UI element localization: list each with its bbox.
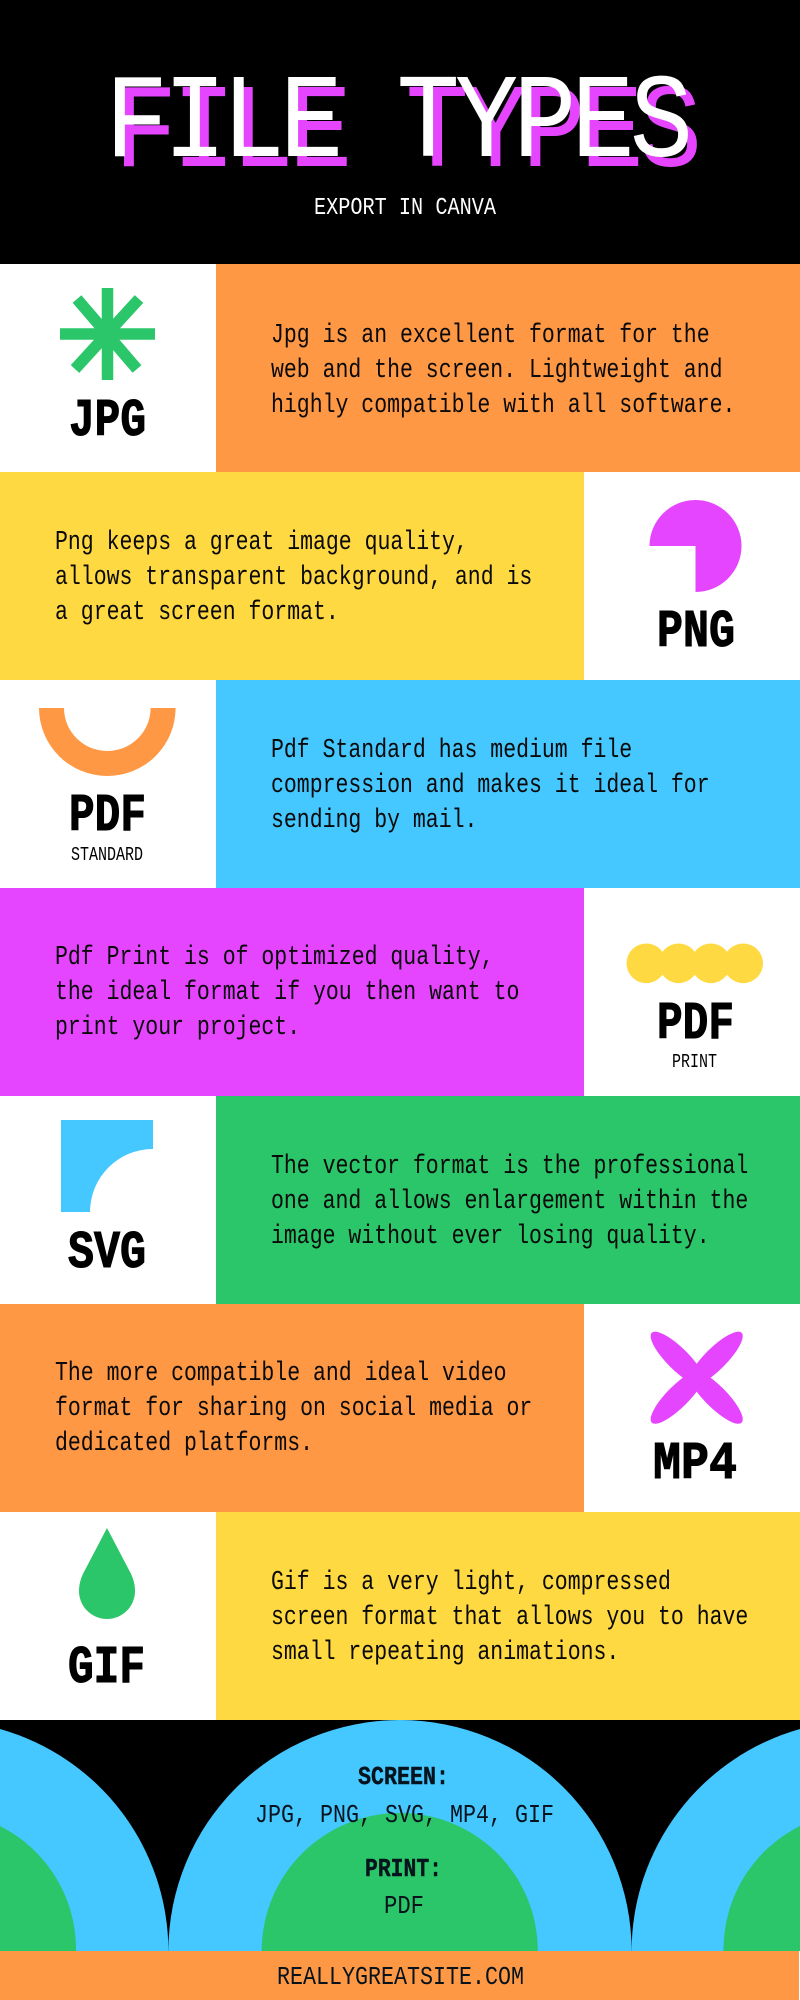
icon: green asterisk xyxy=(60,288,155,380)
icon: orange arc xyxy=(39,708,176,776)
description: PNG: allows transparent background, and is xyxy=(55,563,532,593)
description: GIF: Gif is a very light, compressed xyxy=(271,1568,671,1598)
icon: four yellow circles xyxy=(626,944,763,983)
panel: PDF print xyxy=(0,888,800,1096)
description: PDF print xyxy=(55,943,519,1043)
panel: PDF standard xyxy=(0,680,800,888)
panel: PNG xyxy=(0,472,800,680)
description: MP4 xyxy=(55,1359,532,1459)
description: PDF print: print your project. xyxy=(55,1013,300,1043)
description: PNG: a great screen format. xyxy=(55,598,339,628)
label: PNG: PNG xyxy=(657,602,735,662)
sublabel: STANDARD: STANDARD xyxy=(71,844,143,866)
title: FILE TYPES xyxy=(105,56,689,192)
subtitle: EXPORT IN CANVA xyxy=(314,195,496,222)
arches xyxy=(0,1720,800,1951)
description: MP4: dedicated platforms. xyxy=(55,1429,313,1459)
description: SVG xyxy=(271,1152,748,1252)
title: FILE TYPES xyxy=(114,66,698,202)
header panel xyxy=(0,0,800,264)
label: JPG: JPG xyxy=(69,391,146,451)
icon: green drop xyxy=(79,1528,135,1619)
description: PDF print: Pdf Print is of optimized quality, xyxy=(55,943,494,973)
description: PNG: Png keeps a great image quality, xyxy=(55,528,468,558)
description: PNG xyxy=(55,528,532,628)
description: GIF: small repeating animations. xyxy=(271,1638,619,1668)
description: PDF print: the ideal format if you then want to xyxy=(55,978,519,1008)
panel: MP4 xyxy=(0,1288,800,1512)
label: PDF: PDF xyxy=(69,786,146,846)
heading: print: PRINT: xyxy=(365,1854,442,1884)
description: PDF standard: sending by mail. xyxy=(271,806,477,836)
description: GIF xyxy=(271,1568,748,1668)
description: PDF standard: Pdf Standard has medium file xyxy=(271,736,632,766)
description: MP4: format for sharing on social media or xyxy=(55,1394,532,1424)
description: MP4: The more compatible and ideal video xyxy=(55,1359,506,1389)
description: JPG xyxy=(271,321,735,421)
icon: blue square with curved cut xyxy=(61,1120,153,1212)
icon: magenta X xyxy=(607,1288,787,1468)
panel: export summary with arches xyxy=(0,1720,800,1951)
panel: JPG xyxy=(0,264,800,472)
print formats: PDF xyxy=(384,1891,424,1921)
label: GIF: GIF xyxy=(68,1638,145,1698)
label: PDF: PDF xyxy=(657,994,734,1054)
panel: SVG xyxy=(0,1096,800,1304)
label: MP4: MP4 xyxy=(653,1434,737,1494)
panel: GIF xyxy=(0,1512,800,1720)
description: PDF standard xyxy=(271,736,710,836)
icon: magenta three-quarter circle xyxy=(650,500,742,592)
sublabel: PRINT: PRINT xyxy=(672,1051,717,1073)
website: REALLYGREATSITE.COM xyxy=(277,1962,524,1992)
footer xyxy=(0,1951,799,2000)
screen formats: JPG, PNG, SVG, MP4, GIF xyxy=(255,1800,554,1830)
label: SVG: SVG xyxy=(68,1223,146,1283)
heading: screen: SCREEN: xyxy=(358,1762,449,1792)
